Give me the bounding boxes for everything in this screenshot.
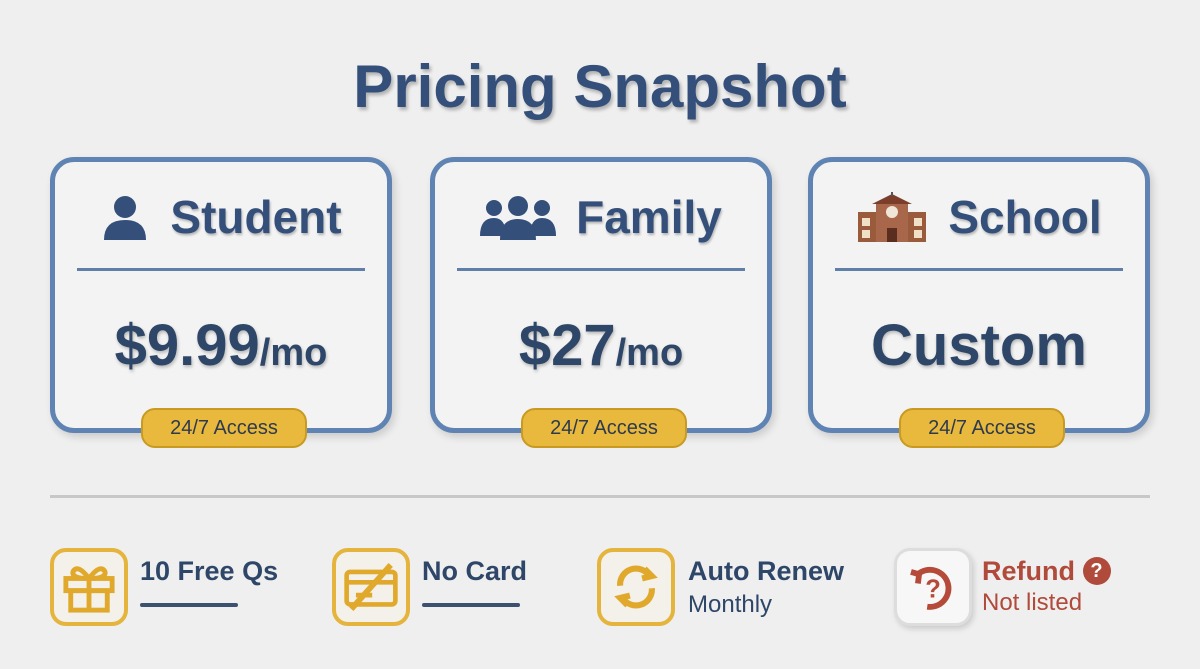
text: no card: No Card <box>422 556 527 586</box>
text: auto renew <box>688 556 844 618</box>
icon: refund: ? <box>925 575 941 603</box>
heading: family: Family <box>576 191 722 243</box>
heading: school <box>858 191 1102 243</box>
price: family: $27/mo <box>519 313 683 378</box>
text: free qs: 10 Free Qs <box>140 556 278 586</box>
heading: student: Student <box>170 191 342 243</box>
icon: no card <box>332 548 410 626</box>
text: refund: Not listed <box>982 589 1082 616</box>
badge: 24/7 Access <box>550 417 658 439</box>
badge <box>141 408 307 448</box>
heading: family <box>480 191 723 246</box>
icon: refund <box>894 548 972 626</box>
text: auto renew: Auto Renew <box>688 556 844 586</box>
text: auto renew: Monthly <box>688 591 772 618</box>
text: refund <box>982 556 1111 616</box>
title: Pricing Snapshot <box>353 53 847 120</box>
text: free qs <box>140 556 278 607</box>
panel: family <box>430 157 772 433</box>
panel: school <box>808 157 1150 433</box>
badge: 24/7 Access <box>928 417 1036 439</box>
text: no card <box>422 556 527 607</box>
badge: 24/7 Access <box>170 417 278 439</box>
panel: student <box>50 157 392 433</box>
badge <box>899 408 1065 448</box>
text: refund: ? <box>1090 560 1103 582</box>
heading: school: School <box>948 191 1102 243</box>
price: school: Custom <box>871 313 1087 378</box>
icon: gift <box>50 548 128 626</box>
icon: auto renew <box>597 548 675 626</box>
badge <box>521 408 687 448</box>
text: refund: Refund <box>982 556 1075 586</box>
price: student: $9.99/mo <box>115 313 327 378</box>
